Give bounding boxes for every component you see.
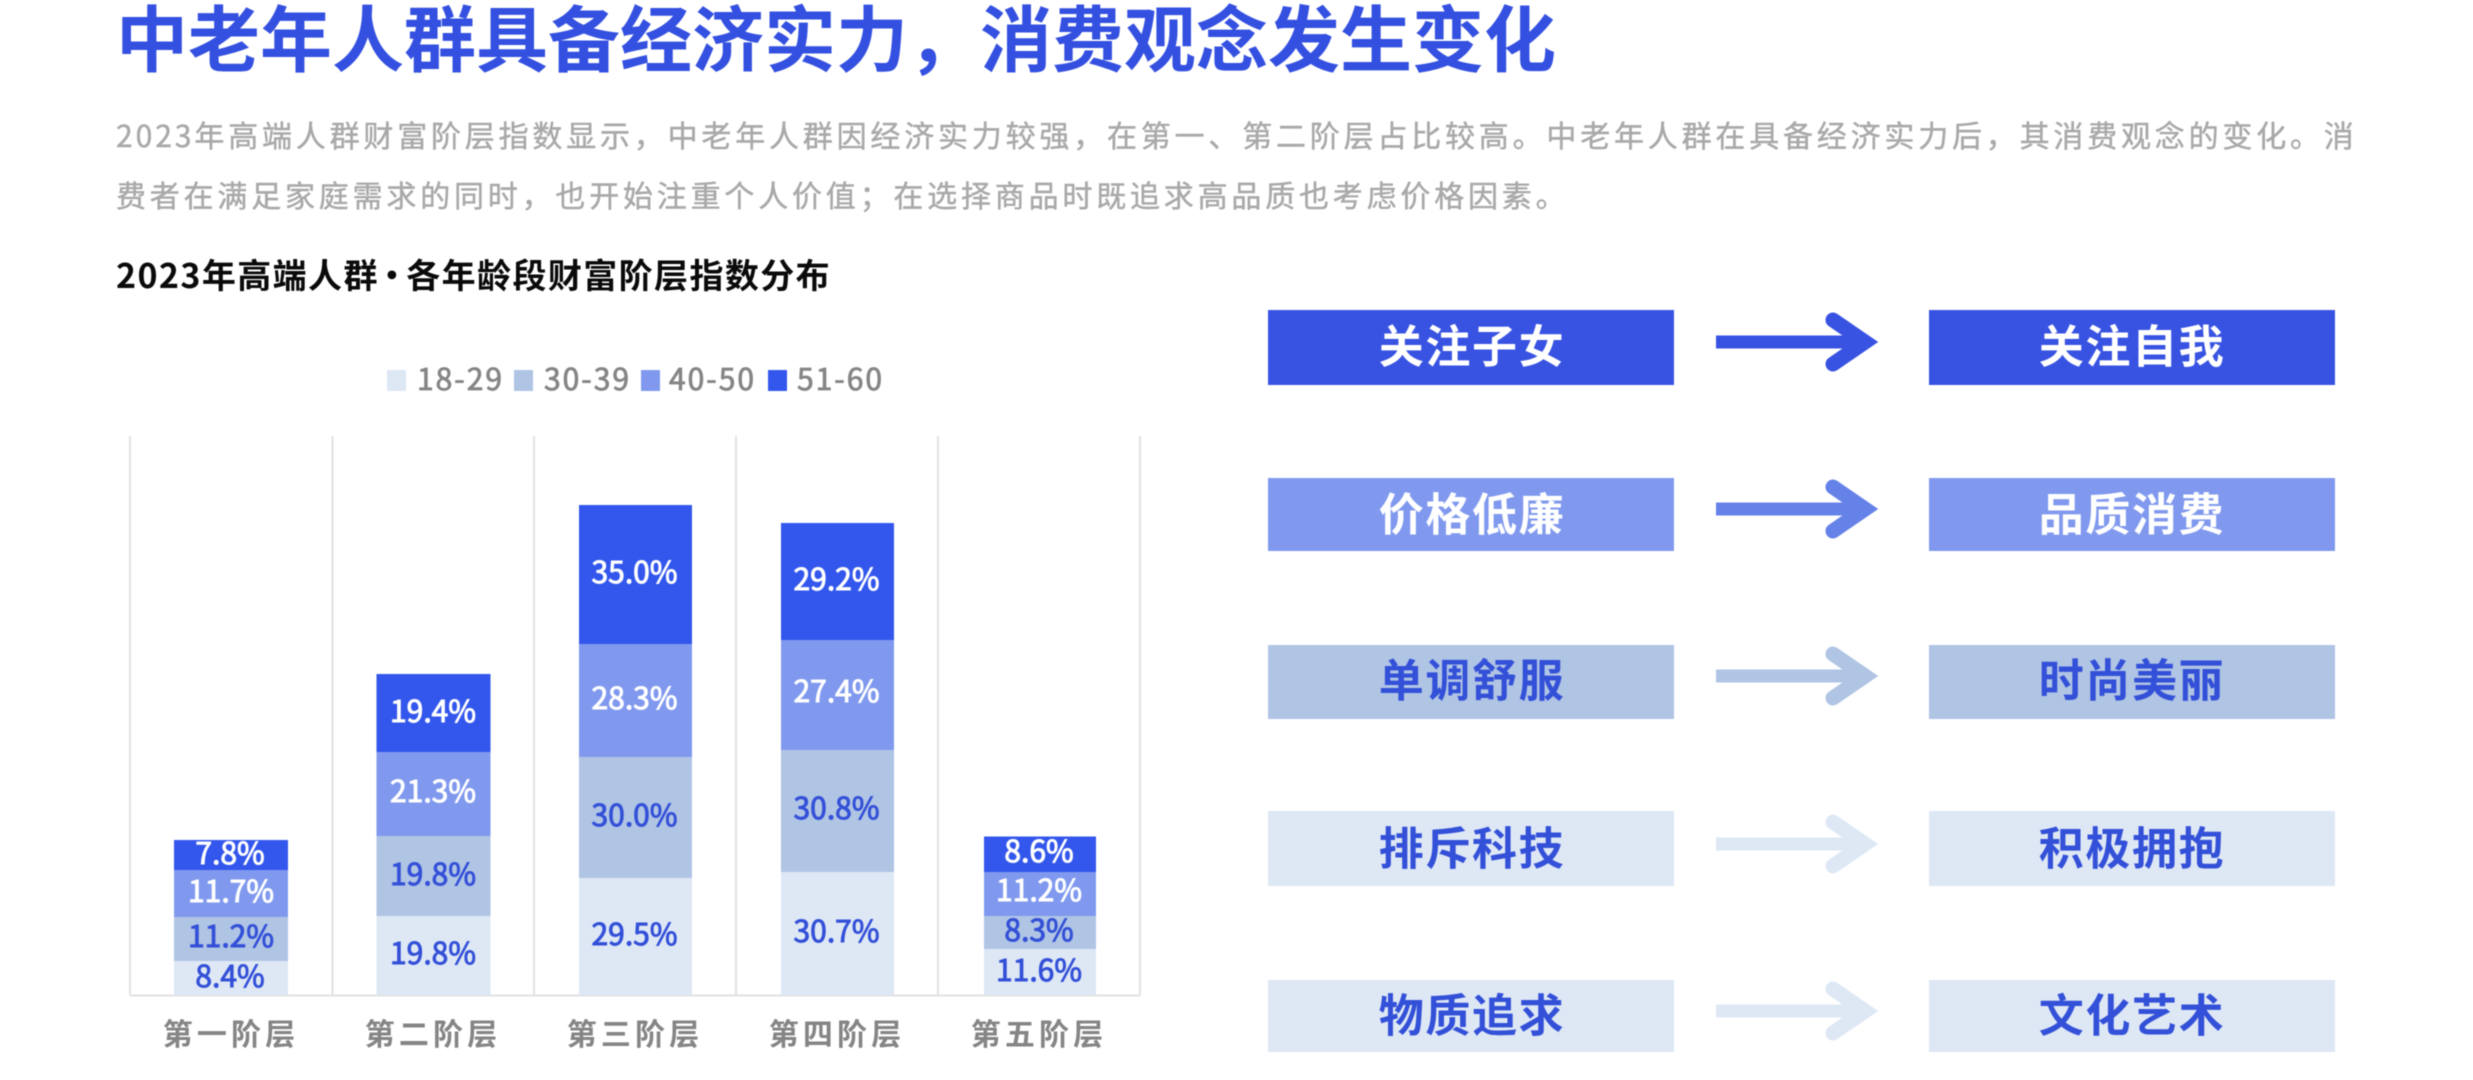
bar: 第一阶层: 11.2%: [188, 912, 274, 956]
bar: 第一阶层: 8.4%: [195, 952, 265, 996]
bar: 第五阶层: 8.6%: [1004, 827, 1074, 871]
shift comparison panel: [1268, 310, 2335, 1052]
bar: 第四阶层: 30.7%: [794, 907, 879, 951]
x axis labels: [163, 1010, 1107, 1054]
row 5: 物质追求 to 文化艺术: 文化艺术: [2039, 980, 2225, 1044]
row 3: 单调舒服 to 时尚美丽: 单调舒服: [1379, 644, 1565, 710]
bar: 第五阶层: 11.2%: [996, 866, 1082, 910]
bar: 第三阶层: [579, 505, 692, 995]
bar: 第三阶层: 30.0%: [592, 791, 677, 835]
bar: 第二阶层: 19.4%: [390, 687, 476, 731]
stacked bar chart: [130, 355, 1140, 1054]
row 1: 关注子女 to 关注自我: [1268, 310, 2335, 385]
x axis labels: 第三阶层: [567, 1010, 703, 1054]
bar: 第四阶层: 29.2%: [794, 555, 879, 599]
row 4: 排斥科技 to 积极拥抱: [1268, 811, 2335, 886]
legend: 18-29: [417, 355, 504, 399]
bar: 第二阶层: [376, 674, 490, 995]
row 1: 关注子女 to 关注自我: 关注自我: [2039, 310, 2225, 376]
bar: 第三阶层: 28.3%: [592, 674, 677, 718]
intro paragraph: 2023年高端人群财富阶层指数显示，中老年人群因经济实力较强，在第一、第二阶层占比较高。中老年人群在具备经济实力后，其消费观念的变化。消: [116, 112, 2358, 156]
intro paragraph: 费者在满足家庭需求的同时，也开始注重个人价值；在选择商品时既追求高品质也考虑价格因素。: [116, 172, 1569, 216]
bar: 第三阶层: 35.0%: [592, 548, 677, 592]
row 5: 物质追求 to 文化艺术: [1268, 980, 2335, 1052]
intro paragraph: [116, 112, 2358, 216]
bar: 第四阶层: [781, 523, 894, 995]
bar: 第二阶层: 19.8%: [390, 850, 476, 894]
x axis labels: 第一阶层: [163, 1010, 299, 1054]
bar: 第四阶层: 30.8%: [794, 784, 879, 828]
bar: 第五阶层: 11.6%: [996, 946, 1082, 990]
row 3: 单调舒服 to 时尚美丽: [1268, 644, 2335, 719]
legend: 51-60: [797, 355, 884, 399]
row 4: 排斥科技 to 积极拥抱: 排斥科技: [1379, 812, 1565, 878]
x axis labels: 第二阶层: [365, 1010, 501, 1054]
row 2: 价格低廉 to 品质消费: [1268, 478, 2335, 551]
x axis labels: 第四阶层: [769, 1010, 905, 1054]
legend: 30-39: [544, 355, 631, 399]
chart heading: 2023年高端人群·各年龄段财富阶层指数分布: [116, 249, 831, 298]
bar: 第五阶层: [984, 827, 1096, 995]
row 3: 单调舒服 to 时尚美丽: 时尚美丽: [2039, 644, 2225, 710]
bar: 第三阶层: 29.5%: [592, 910, 677, 954]
row 5: 物质追求 to 文化艺术: 物质追求: [1379, 980, 1565, 1044]
bar: 第一阶层: 11.7%: [188, 867, 274, 911]
row 2: 价格低廉 to 品质消费: 价格低廉: [1379, 478, 1565, 544]
bar: 第四阶层: 27.4%: [794, 667, 879, 711]
legend: [387, 355, 884, 399]
bar: 第二阶层: 21.3%: [390, 767, 476, 811]
bar: 第一阶层: 7.8%: [195, 829, 265, 873]
bar: 第五阶层: 8.3%: [1004, 906, 1074, 950]
row 2: 价格低廉 to 品质消费: 品质消费: [2039, 478, 2225, 544]
bar: 第一阶层: [174, 829, 288, 996]
row 1: 关注子女 to 关注自我: 关注子女: [1379, 310, 1565, 376]
legend: 40-50: [669, 355, 756, 399]
row 4: 排斥科技 to 积极拥抱: 积极拥抱: [2039, 812, 2225, 878]
bar: 第二阶层: 19.8%: [390, 929, 476, 973]
x axis labels: 第五阶层: [971, 1010, 1107, 1054]
